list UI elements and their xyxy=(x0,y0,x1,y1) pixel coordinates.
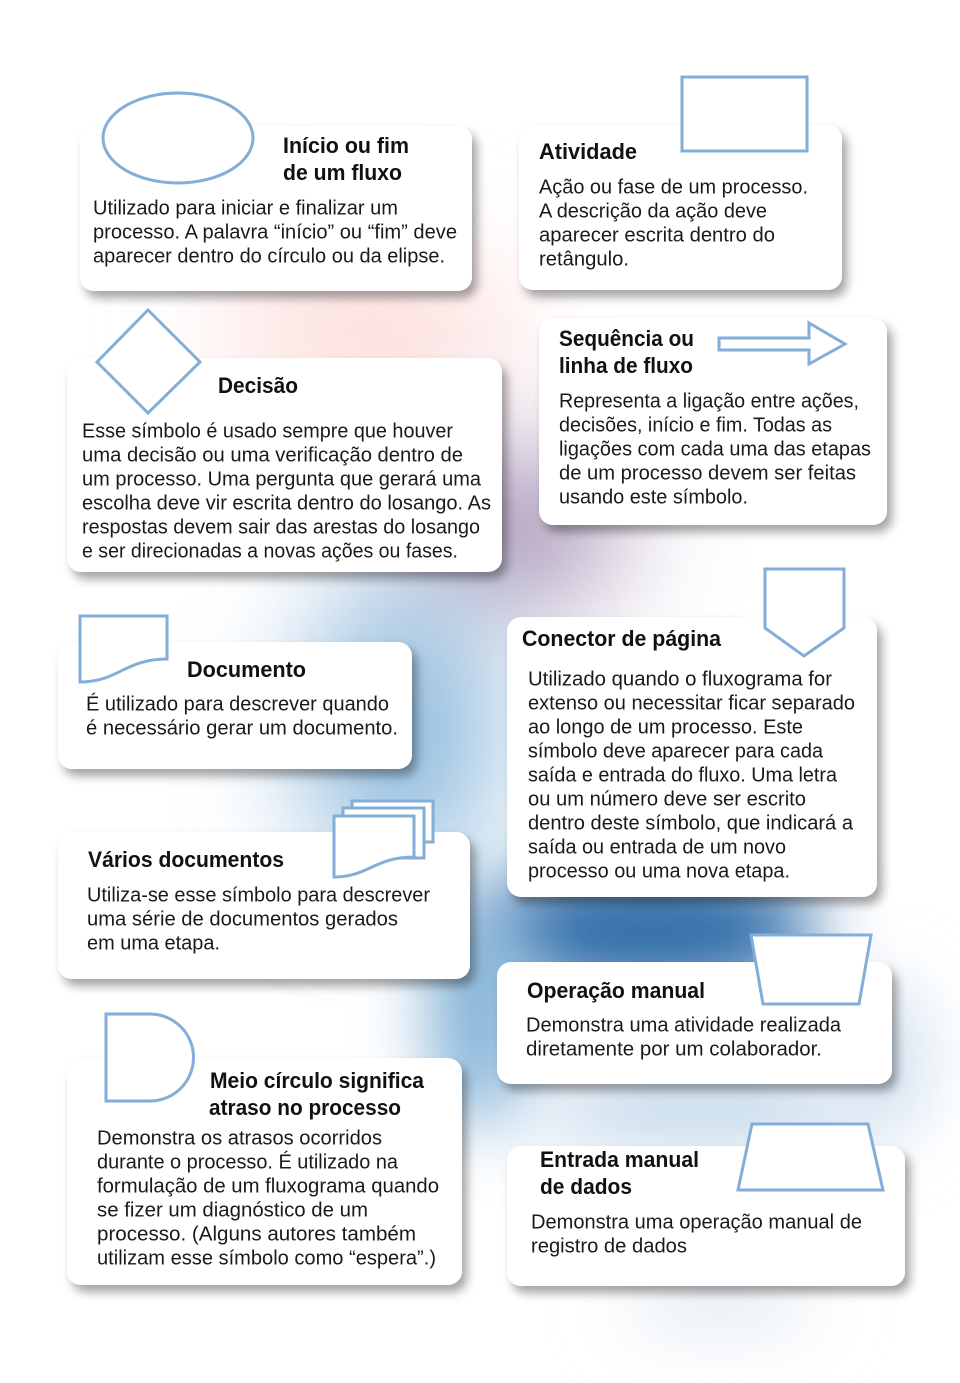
text: vários documentos xyxy=(87,884,430,954)
text: atividade: aparecer escrita dentro do xyxy=(539,224,775,246)
text: conector: ao longo de um processo. Este xyxy=(528,716,803,738)
text: sequência: ligações com cada uma das etapas xyxy=(559,438,871,460)
text: conector: dentro deste símbolo, que indicará a xyxy=(528,812,854,834)
text: conector: ou um número deve ser escrito xyxy=(528,788,806,810)
heading: vários documentos: Vários documentos xyxy=(88,847,284,872)
text: conector: extenso ou necessitar ficar separado xyxy=(528,692,855,714)
heading: decisão: Decisão xyxy=(218,373,298,398)
text: atividade: Ação ou fase de um processo. xyxy=(539,176,808,198)
text: conector: processo ou uma nova etapa. xyxy=(528,860,790,882)
text: conector: saída e entrada do fluxo. Uma letra xyxy=(528,764,838,786)
heading: início ou fim: Início ou fim xyxy=(283,133,409,158)
text: meio círculo: durante o processo. É utilizado na xyxy=(97,1150,399,1173)
text: conector: símbolo deve aparecer para cada xyxy=(528,740,824,762)
icon: document xyxy=(80,616,167,682)
icon: arrow xyxy=(719,323,845,364)
heading: sequência xyxy=(559,326,694,378)
text: início ou fim: processo. A palavra “início” ou “fim” deve xyxy=(93,221,457,243)
text: entrada manual xyxy=(531,1211,862,1257)
text: decisão: uma decisão ou uma verificação dentro de xyxy=(82,444,463,466)
text: documento: é necessário gerar um documento. xyxy=(86,717,398,739)
text: vários documentos: uma série de documentos gerados xyxy=(87,908,398,930)
heading: atividade: Atividade xyxy=(539,139,637,164)
heading: entrada manual xyxy=(540,1147,699,1199)
heading: meio círculo: Meio círculo significa xyxy=(210,1068,425,1093)
panel: atividade xyxy=(519,77,842,290)
text: decisão xyxy=(82,420,491,562)
text: meio círculo: Demonstra os atrasos ocorridos xyxy=(97,1127,382,1149)
icon: multiple documents xyxy=(334,801,433,877)
panel: vários documentos xyxy=(58,801,470,979)
heading: operação manual: Operação manual xyxy=(527,978,705,1003)
panel: operação manual xyxy=(497,935,892,1084)
text: decisão: escolha deve vir escrita dentro do losango. As xyxy=(82,492,491,514)
icon: trapezoid xyxy=(738,1124,883,1190)
text: operação manual: Demonstra uma atividade realizada xyxy=(526,1014,842,1036)
icon: rectangle xyxy=(682,77,807,151)
panel: sequência xyxy=(539,318,887,525)
text: operação manual: diretamente por um colaborador. xyxy=(526,1038,822,1060)
text: sequência xyxy=(559,390,871,508)
heading: início ou fim xyxy=(283,133,409,185)
text: vários documentos: em uma etapa. xyxy=(87,932,220,954)
text: decisão: e ser direcionadas a novas ações ou fases. xyxy=(82,540,458,562)
panel: documento xyxy=(58,616,412,769)
panel: meio círculo xyxy=(67,1014,462,1285)
text: meio círculo: processo. (Alguns autores também xyxy=(97,1223,416,1245)
text: sequência: de um processo devem ser feitas xyxy=(559,462,856,484)
icon: half circle xyxy=(106,1014,193,1101)
text: início ou fim: Utilizado para iniciar e finalizar um xyxy=(93,197,398,219)
text: sequência: Representa a ligação entre ações, xyxy=(559,390,859,412)
text: vários documentos: Utiliza-se esse símbolo para descrever xyxy=(87,884,430,906)
text: documento: É utilizado para descrever quando xyxy=(86,692,389,715)
panel: decisão xyxy=(67,310,502,572)
text: sequência: usando este símbolo. xyxy=(559,486,748,508)
text: conector xyxy=(528,668,855,882)
text: documento xyxy=(86,692,398,739)
icon: inverted trapezoid xyxy=(751,935,871,1004)
heading: meio círculo: atraso no processo xyxy=(209,1095,401,1120)
heading: meio círculo xyxy=(209,1068,425,1120)
text: início ou fim xyxy=(93,197,457,267)
text: entrada manual: registro de dados xyxy=(531,1235,687,1257)
text: conector: Utilizado quando o fluxograma for xyxy=(528,668,832,690)
text: meio círculo xyxy=(97,1127,439,1269)
icon: off-page connector xyxy=(765,569,844,656)
panel: início ou fim xyxy=(80,93,472,291)
text: meio círculo: utilizam esse símbolo como “espera”.) xyxy=(97,1247,436,1269)
text: conector: saída ou entrada de um novo xyxy=(528,836,786,858)
text: decisão: Esse símbolo é usado sempre que houver xyxy=(82,420,453,442)
icon: ellipse xyxy=(103,93,253,183)
heading: início ou fim: de um fluxo xyxy=(283,160,402,185)
heading: documento: Documento xyxy=(187,657,306,682)
text: entrada manual: Demonstra uma operação manual de xyxy=(531,1211,862,1233)
heading: entrada manual: de dados xyxy=(540,1174,632,1199)
icon: diamond xyxy=(97,310,200,413)
panel: entrada manual xyxy=(507,1124,905,1286)
heading: conector: Conector de página xyxy=(522,626,722,651)
heading: sequência: Sequência ou xyxy=(559,326,694,351)
text: decisão: um processo. Uma pergunta que gerará uma xyxy=(82,468,482,490)
text: operação manual xyxy=(526,1014,842,1060)
text: meio círculo: formulação de um fluxograma quando xyxy=(97,1175,439,1197)
heading: sequência: linha de fluxo xyxy=(559,353,693,378)
text: meio círculo: se fizer um diagnóstico de um xyxy=(97,1199,368,1221)
panel: conector de página xyxy=(507,569,877,897)
text: atividade: retângulo. xyxy=(539,248,629,270)
heading: entrada manual: Entrada manual xyxy=(540,1147,699,1172)
text: início ou fim: aparecer dentro do círculo ou da elipse. xyxy=(93,245,445,267)
text: atividade xyxy=(539,176,808,270)
text: sequência: decisões, início e fim. Todas as xyxy=(559,414,832,436)
text: decisão: respostas devem sair das arestas do losango xyxy=(82,516,480,538)
text: atividade: A descrição da ação deve xyxy=(539,200,767,222)
